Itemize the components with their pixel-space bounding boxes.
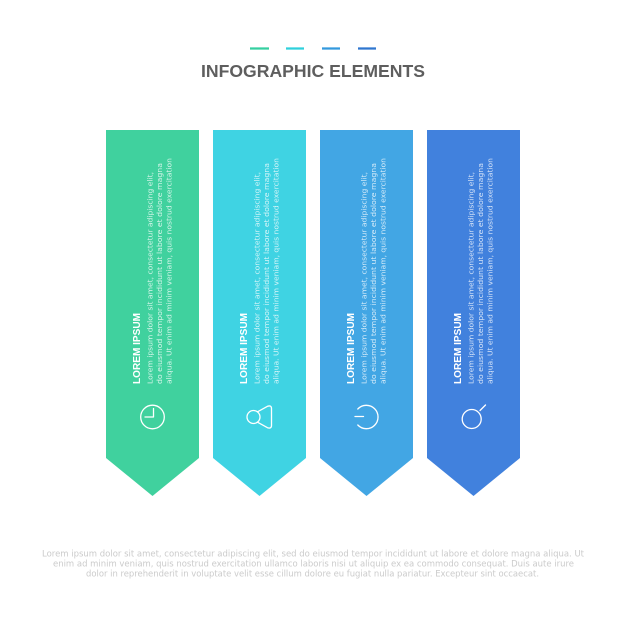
title: INFOGRAPHIC ELEMENTS bbox=[201, 61, 425, 81]
body text: do eiusmod tempor incididunt ut labore et dolore magna bbox=[369, 163, 378, 384]
heading: LOREM IPSUM bbox=[238, 313, 250, 384]
body text: Lorem ipsum dolor sit amet, consectetur adipiscing elit, bbox=[360, 172, 368, 384]
body text: aliqua. Ut enim ad minim veniam, quis nostrud exercitation bbox=[164, 158, 174, 384]
footer text bbox=[42, 548, 585, 578]
body text bbox=[252, 158, 280, 384]
body text: Lorem ipsum dolor sit amet, consectetur adipiscing elit, bbox=[252, 172, 262, 384]
panel: dark blue bbox=[427, 130, 520, 496]
icon: ring with tick bbox=[462, 405, 486, 428]
body text: aliqua. Ut enim ad minim veniam, quis nostrud exercitation bbox=[272, 158, 280, 384]
banner shape bbox=[320, 130, 413, 496]
body text: Lorem ipsum dolor sit amet, consectetur adipiscing elit, bbox=[146, 172, 154, 384]
footer text: Lorem ipsum dolor sit amet, consectetur adipiscing elit, sed do eiusmod tempor incididunt ut labore et dolore magna aliqua. Ut bbox=[42, 548, 585, 558]
body text: aliqua. Ut enim ad minim veniam, quis nostrud exercitation bbox=[378, 158, 388, 384]
body text: do eiusmod tempor incididunt ut labore et dolore magna bbox=[476, 163, 485, 384]
heading: LOREM IPSUM bbox=[452, 313, 464, 384]
footer text: dolor in reprehenderit in voluptate velit esse cillum dolore eu fugiat nulla pariatur. Excepteur sint occaecat. bbox=[86, 568, 539, 578]
panel: cyan bbox=[213, 130, 306, 496]
heading: LOREM IPSUM bbox=[131, 313, 143, 384]
footer text: enim ad minim veniam, quis nostrud exercitation ullamco laboris nisi ut aliquip ex ea commodo consequat. Duis aute irure bbox=[53, 558, 574, 568]
body text: aliqua. Ut enim ad minim veniam, quis nostrud exercitation bbox=[486, 158, 494, 384]
body text bbox=[466, 158, 494, 384]
icon: circle and bell shape bbox=[247, 406, 272, 428]
accent dashes bbox=[250, 47, 376, 50]
banner shape bbox=[427, 130, 520, 496]
panel: blue bbox=[320, 130, 413, 496]
banner shape bbox=[213, 130, 306, 496]
body text bbox=[146, 158, 174, 384]
panel: green bbox=[106, 130, 199, 496]
body text: Lorem ipsum dolor sit amet, consectetur adipiscing elit, bbox=[466, 172, 476, 384]
body text: do eiusmod tempor incididunt ut labore et dolore magna bbox=[262, 163, 271, 384]
body text bbox=[360, 158, 388, 384]
heading: LOREM IPSUM bbox=[345, 313, 357, 384]
banner shape bbox=[106, 130, 199, 496]
icon: clock bbox=[141, 405, 164, 429]
body text: do eiusmod tempor incididunt ut labore et dolore magna bbox=[155, 163, 164, 384]
icon: open ring with dash bbox=[355, 405, 378, 429]
